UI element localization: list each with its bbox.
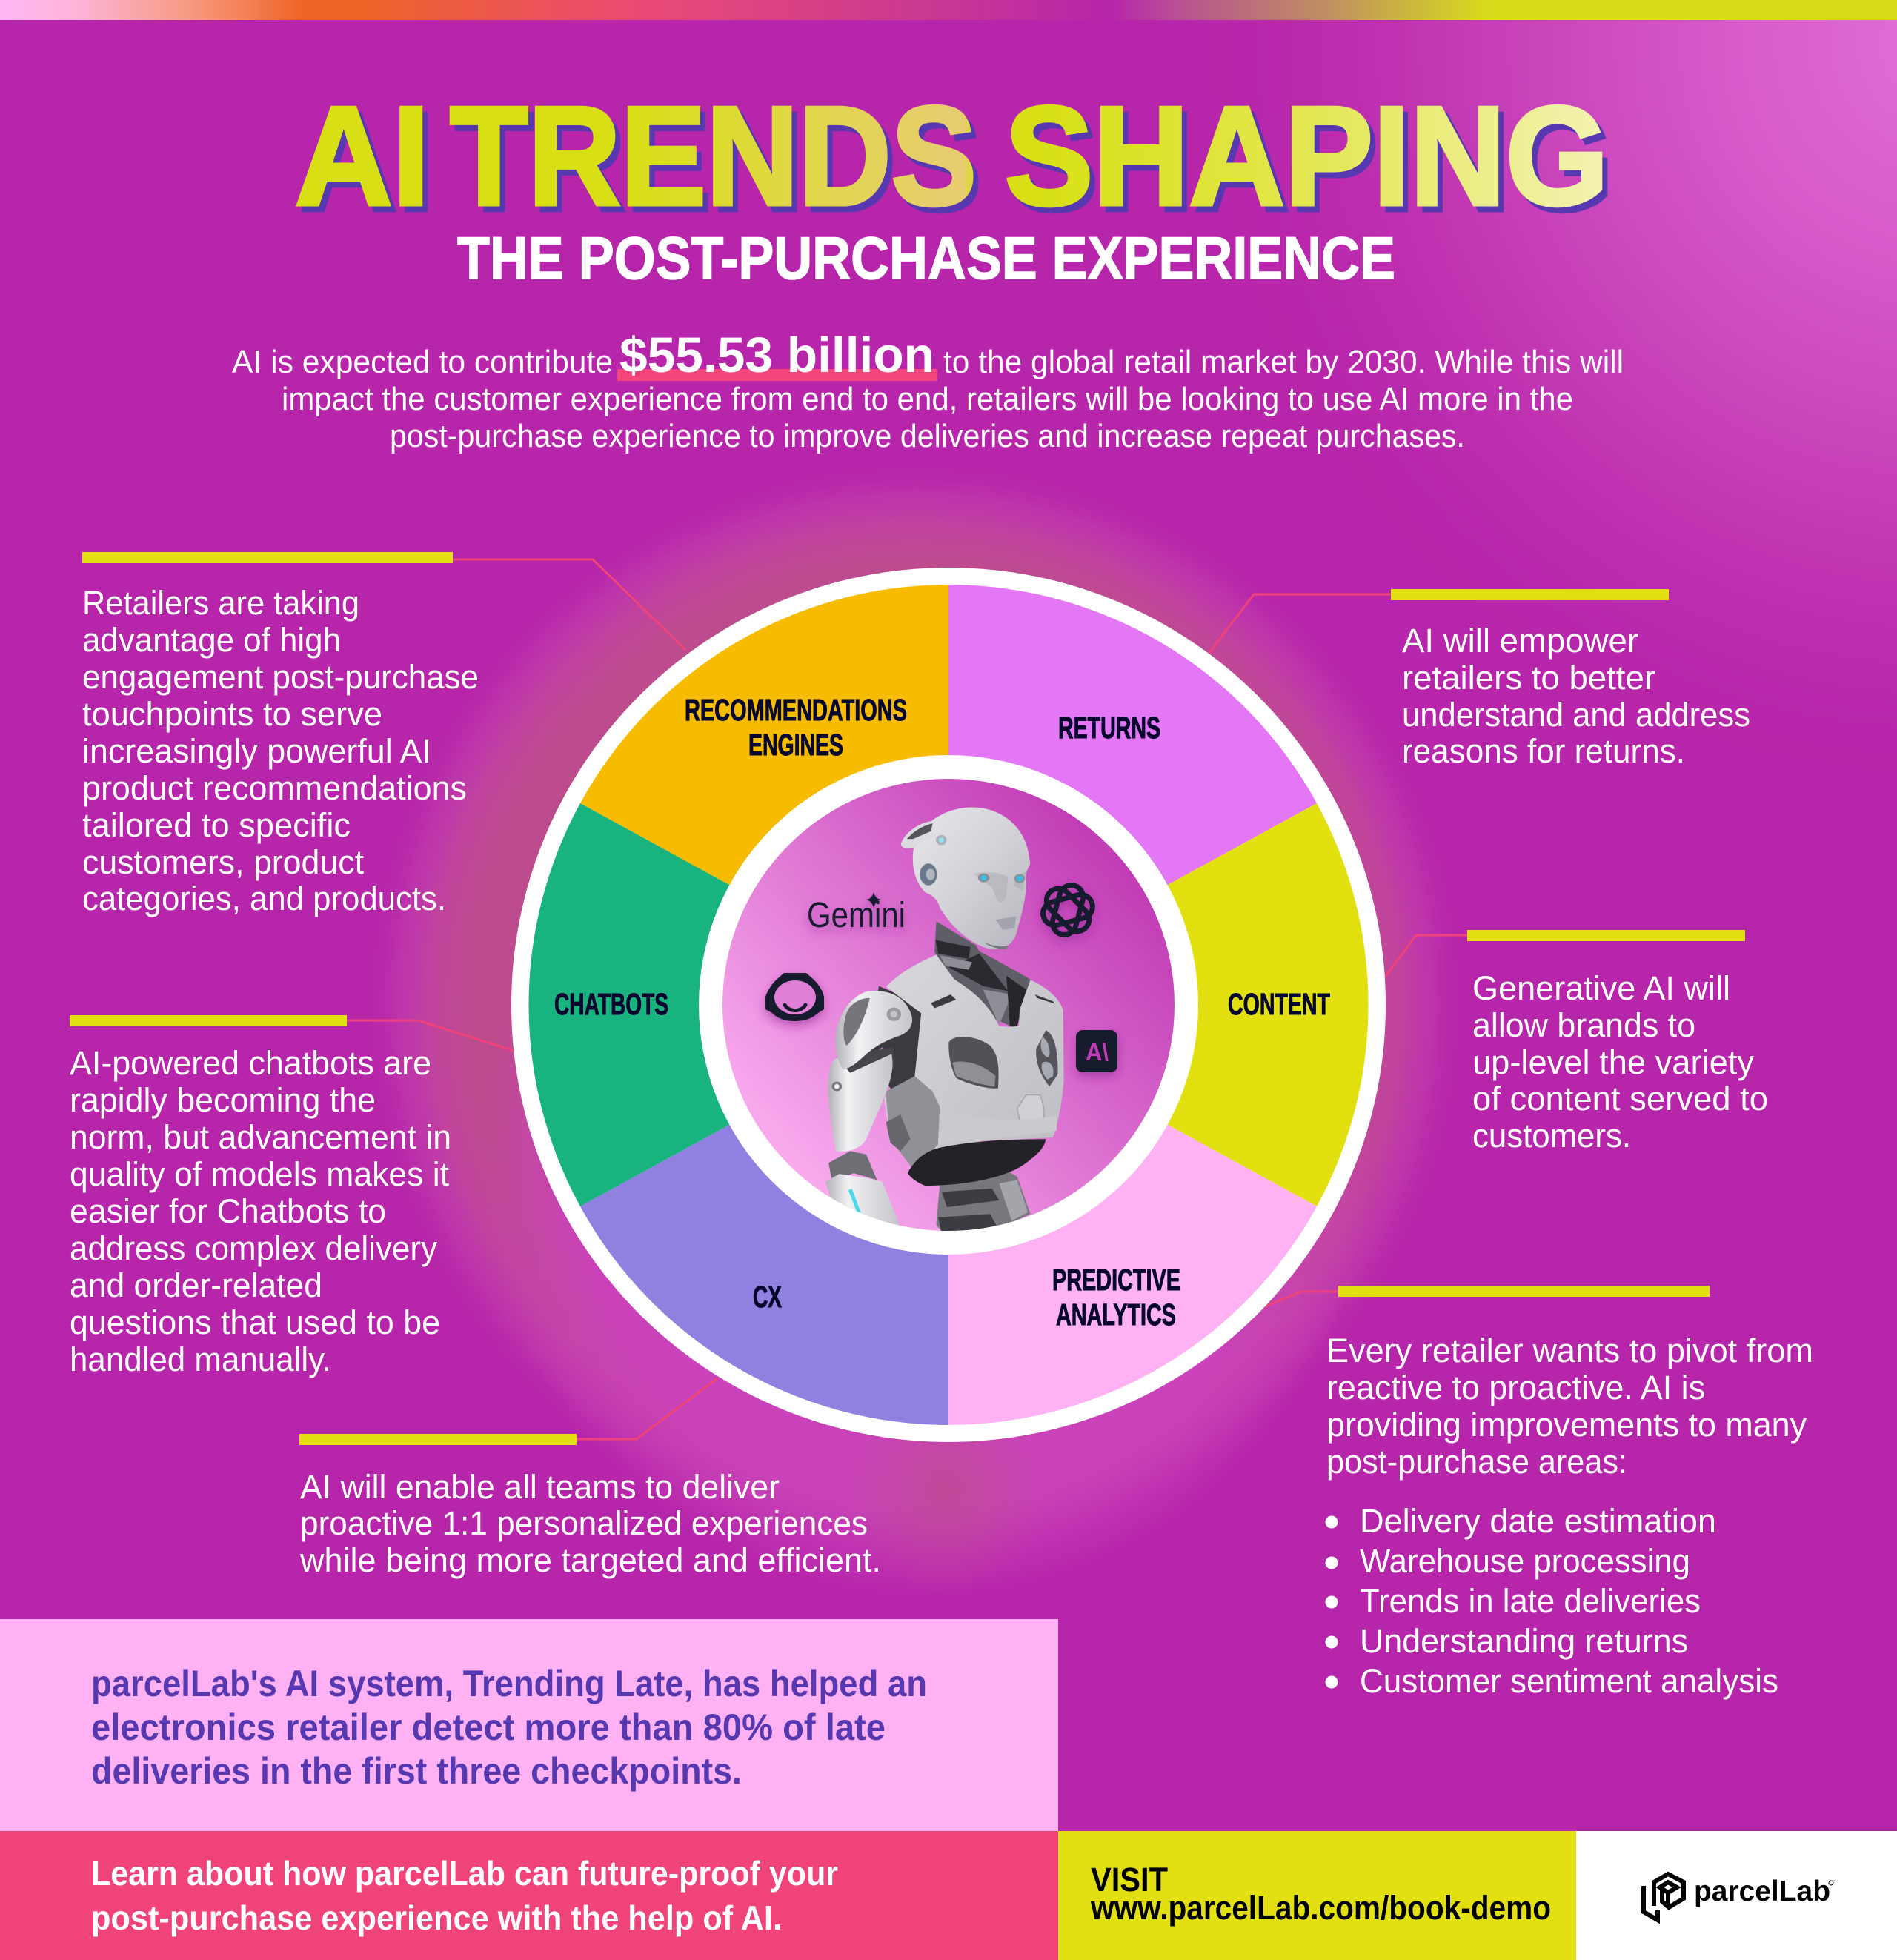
inner gradient disc — [722, 779, 1175, 1231]
torso — [884, 954, 1064, 1172]
chest vents — [931, 994, 1054, 1008]
inner white ring — [699, 755, 1198, 1255]
callout: returns: retailers to better — [1402, 659, 1655, 697]
callout: cx: AI will enable all teams to deliver — [300, 1468, 780, 1506]
callout: cx: proactive 1:1 personalized experiences — [300, 1504, 868, 1542]
subtitle: THE POST-PURCHASE EXPERIENCE — [457, 225, 1395, 292]
callout: chatbots: quality of models makes it — [70, 1155, 449, 1193]
callout: chatbots: and order-related — [70, 1266, 322, 1304]
dark shoulder backing — [869, 986, 922, 1089]
belt — [908, 1139, 1046, 1186]
top gradient bar — [0, 0, 1897, 20]
panel: visit link: VISIT — [1091, 1861, 1168, 1898]
callout: chatbots: norm, but advancement in — [70, 1118, 451, 1156]
icon: parcelLab cube — [1644, 1874, 1684, 1920]
callout: chatbots: rapidly becoming the — [70, 1081, 376, 1119]
icon: robot — [825, 808, 1064, 1235]
panel: trending late stat: parcelLab's AI system, Trending Late, has helped an — [91, 1663, 927, 1704]
chest window right — [1036, 1030, 1057, 1086]
callout: predictive analytics: Every retailer wants to pivot from — [1326, 1332, 1813, 1369]
segment: recommendations engines — [580, 585, 948, 1005]
callout: recommendations engines: advantage of high — [82, 621, 341, 659]
callout: recommendations engines: categories, and products. — [82, 880, 446, 917]
shoulder — [835, 991, 912, 1069]
callout: content: allow brands to — [1472, 1006, 1695, 1044]
callout: chatbots: handled manually. — [70, 1341, 331, 1378]
callout: predictive analytics: reactive to proactive. AI is — [1326, 1369, 1705, 1406]
eyes — [978, 874, 989, 883]
panel: trending late stat — [0, 1619, 1058, 1831]
icon: gemini logo: Gemini — [807, 896, 906, 935]
title — [295, 78, 1614, 241]
bullet list: Warehouse processing — [1360, 1542, 1690, 1580]
intro text block: post-purchase experience to improve deliveries and increase repeat purchases. — [390, 418, 1465, 454]
callout: returns — [1391, 589, 1750, 770]
title: TRENDS — [450, 78, 977, 235]
panel: trending late stat: electronics retailer detect more than 80% of late — [91, 1707, 886, 1748]
callout: returns: understand and address — [1402, 696, 1750, 734]
wheel labels: CONTENT — [1228, 987, 1330, 1021]
bullet list: Understanding returns — [1360, 1622, 1688, 1660]
callout: chatbots — [70, 1015, 451, 1378]
callout: cx — [299, 1434, 881, 1579]
intro text block: to the global retail market by 2030. While this will — [943, 344, 1624, 380]
callout: predictive analytics — [1325, 1286, 1813, 1700]
wheel labels: PREDICTIVE — [1052, 1263, 1180, 1297]
wheel labels: RETURNS — [1058, 711, 1160, 745]
panel: visit link — [1058, 1831, 1576, 1960]
callout: recommendations engines: Retailers are taking — [82, 584, 359, 622]
intro text block: impact the customer experience from end to end, retailers will be looking to use AI more in the — [282, 381, 1573, 417]
callout: predictive analytics: providing improvements to many — [1326, 1406, 1807, 1444]
callout: recommendations engines: product recommendations — [82, 769, 467, 807]
bullet list: Customer sentiment analysis — [1360, 1662, 1778, 1700]
bullet list — [1325, 1502, 1778, 1700]
icon: anthropic logo — [1076, 1030, 1117, 1072]
callout: recommendations engines: tailored to specific — [82, 806, 351, 844]
icon: anthropic logo: A\ — [1086, 1038, 1109, 1066]
callout: content — [1467, 930, 1768, 1155]
segment: chatbots — [528, 803, 948, 1206]
callout: chatbots: easier for Chatbots to — [70, 1192, 386, 1230]
panel: parcelLab logo — [1576, 1831, 1897, 1960]
callout: recommendations engines: engagement post-purchase — [82, 658, 479, 696]
title: AI — [300, 84, 435, 241]
callout: content: up-level the variety — [1472, 1043, 1754, 1081]
upper arm — [828, 1054, 892, 1152]
callout: chatbots: questions that used to be — [70, 1303, 440, 1341]
segment: returns — [948, 585, 1317, 1005]
icon: smiling chat logo — [765, 973, 824, 1021]
wheel labels — [554, 693, 1330, 1332]
chest buckle — [1017, 1094, 1045, 1120]
intro text block: $55.53 billion — [619, 328, 934, 383]
title: SHAPING — [1005, 78, 1609, 235]
callout: returns: AI will empower — [1402, 622, 1638, 660]
callout: content: of content served to — [1472, 1080, 1768, 1117]
panel: trending late stat: deliveries in the first three checkpoints. — [91, 1750, 742, 1792]
callout: chatbots: AI-powered chatbots are — [70, 1044, 431, 1082]
segment: content — [948, 803, 1369, 1206]
title: SHAPING — [1010, 84, 1614, 241]
title: AI — [295, 78, 430, 235]
head — [913, 808, 1031, 949]
callout: recommendations engines: customers, product — [82, 843, 364, 881]
wheel labels: ANALYTICS — [1056, 1298, 1176, 1332]
callout: returns: reasons for returns. — [1402, 732, 1685, 770]
title: TRENDS — [455, 84, 982, 241]
connector lines — [347, 559, 1467, 1439]
wrist and forearm — [828, 1151, 877, 1182]
segment: cx — [580, 1005, 948, 1425]
highlight under figure — [617, 369, 937, 381]
panel: learn more call to action: Learn about how parcelLab can future-proof your — [91, 1854, 838, 1893]
temple lamp — [936, 835, 947, 846]
callout: content: Generative AI will — [1472, 969, 1730, 1007]
intro text block — [232, 328, 1624, 454]
ear — [920, 863, 937, 886]
icon: openai logo — [1040, 883, 1095, 937]
wheel labels: RECOMMENDATIONS — [685, 693, 907, 727]
panel: learn more call to action — [0, 1831, 1058, 1960]
callout: chatbots: address complex delivery — [70, 1229, 437, 1267]
callout: content: customers. — [1472, 1117, 1631, 1155]
bullet list: Trends in late deliveries — [1360, 1582, 1701, 1620]
panel: learn more call to action: post-purchase experience with the help of AI. — [91, 1898, 782, 1937]
wheel diagram — [511, 568, 1386, 1442]
panel: visit link: www.parcelLab.com/book-demo — [1090, 1889, 1551, 1927]
logo wordmark: parcelLab — [1694, 1876, 1830, 1907]
segment: predictive analytics — [948, 1005, 1317, 1425]
chest window left — [948, 1037, 999, 1089]
wheel labels: CX — [753, 1280, 782, 1314]
callout: recommendations engines — [82, 552, 479, 917]
callout: recommendations engines: increasingly powerful AI — [82, 732, 431, 770]
arm joint backing — [836, 1048, 894, 1073]
visor — [901, 821, 934, 848]
lower spine — [937, 1172, 1031, 1235]
intro text block: AI is expected to contribute — [232, 344, 613, 380]
neck — [934, 921, 1031, 1028]
callout: recommendations engines: touchpoints to serve — [82, 695, 382, 733]
callout: predictive analytics: post-purchase areas: — [1326, 1443, 1627, 1481]
wheel labels: CHATBOTS — [554, 987, 668, 1021]
wheel labels: ENGINES — [748, 728, 843, 762]
bullet list: Delivery date estimation — [1360, 1502, 1716, 1540]
callout: cx: while being more targeted and efficient. — [299, 1541, 881, 1579]
